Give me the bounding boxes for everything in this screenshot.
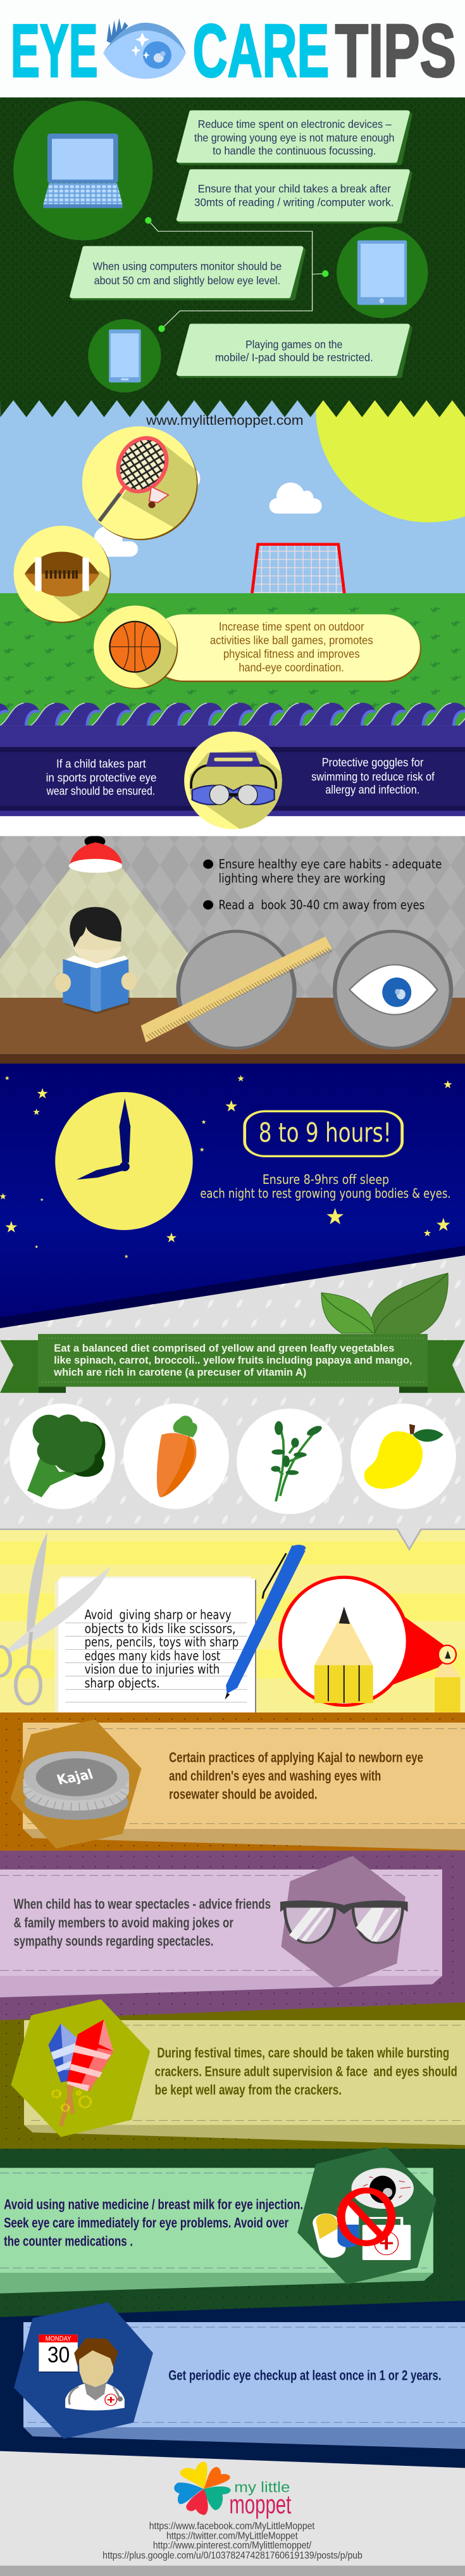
section: diet and sharp objects	[0, 1334, 465, 1712]
card: checkup advice	[23, 2322, 465, 2449]
section: balanced diet background	[0, 1255, 465, 1530]
text: sleep advice	[200, 1172, 450, 1201]
band: protective eye wear: If a child takes part	[56, 758, 146, 770]
desk	[0, 998, 465, 1054]
panel: paper note	[55, 1576, 256, 1712]
ribbon: balanced diet: Eat a balanced diet comprised of yellow and green leafly vegetables	[54, 1342, 395, 1354]
footer links	[102, 2520, 363, 2561]
footer links: https://twitter.com/MyLittleMoppet	[166, 2530, 298, 2541]
card: kajal advice	[23, 1723, 465, 1850]
card: monitor distance: about 50 cm and slightly below eye level.	[94, 274, 280, 287]
card: spectacles advice	[0, 1869, 442, 1997]
card: playing games: mobile/ I-pad should be restricted.	[215, 351, 373, 363]
footer panel	[0, 2451, 465, 2566]
icon: broccoli	[9, 1404, 115, 1509]
badge: 8 to 9 hours	[245, 1111, 402, 1156]
icon: clock	[55, 1092, 193, 1230]
ribbon: balanced diet: like spinach, carrot, broccoli.. yellow fruits including papaya and mango,	[54, 1354, 412, 1366]
icon: goggles	[184, 732, 285, 829]
panel: paper note: edges many kids have lost	[85, 1649, 220, 1664]
card: medicine advice	[0, 2168, 433, 2294]
card: playing games: Playing games on the	[245, 338, 342, 351]
card: spectacles advice: & family members to avoid making jokes or	[14, 1915, 233, 1930]
panel: paper note: Avoid giving sharp or heavy	[85, 1608, 232, 1623]
section: eye checkup	[0, 2303, 465, 2576]
icon: leaves	[321, 1273, 448, 1335]
icon: laptop in circle	[13, 101, 152, 241]
stars	[0, 1075, 452, 1258]
cloud	[270, 482, 322, 513]
leaf pattern	[0, 1255, 465, 1530]
icon: doctor and calendar	[14, 2303, 153, 2439]
logo: my little moppet: my little	[234, 2479, 290, 2496]
text: sleep advice: Ensure 8-9hrs off sleep	[263, 1172, 389, 1187]
card: take a break: 30mts of reading / writing /computer work.	[194, 196, 394, 208]
icon: kajal box	[10, 1719, 142, 1849]
card: monitor distance: When using computers monitor should be	[93, 260, 282, 272]
light cone	[0, 865, 190, 998]
icon: child reading book	[55, 907, 137, 1014]
icon: basketball	[94, 606, 184, 690]
icon: tablet in circle	[337, 227, 428, 318]
card: medicine advice: the counter medications .	[4, 2234, 133, 2249]
icon: carrot	[123, 1404, 229, 1509]
card: spectacles advice: sympathy sounds regarding spectacles.	[14, 1933, 214, 1949]
band: protective eye wear: in sports protective eye	[46, 772, 156, 784]
card: take a break: Ensure that your child takes a break after	[198, 182, 391, 195]
panel: paper note: vision due to injuries with	[85, 1662, 220, 1677]
section background: spectacles	[0, 1850, 465, 2024]
cloud behind circles	[93, 469, 200, 556]
footer bar	[0, 2566, 465, 2576]
icon: no medicine	[297, 2147, 437, 2284]
callout: outdoor activities: activities like ball games, promotes	[210, 634, 373, 648]
card: playing games	[179, 326, 410, 376]
ribbon: balanced diet: which are rich in carotene (a precuser of vitamin A)	[53, 1366, 306, 1378]
callout: outdoor activities: hand-eye coordination.	[239, 662, 344, 674]
callout: outdoor activities	[148, 614, 421, 682]
card: reduce time: to handle the continuous focussing.	[213, 144, 376, 157]
card: kajal advice: rosewater should be avoided.	[169, 1787, 318, 1802]
ribbon: balanced diet	[0, 1334, 465, 1393]
logo: my little moppet	[174, 2462, 291, 2519]
logo: my little moppet: moppet	[229, 2489, 291, 2519]
section: sleep	[0, 1064, 465, 1333]
waves	[0, 703, 465, 726]
section background: eye checkup	[0, 2301, 465, 2469]
panel: paper note: pens, pencils, toys with sharp	[85, 1635, 239, 1650]
title: EYE	[11, 9, 98, 93]
footer links: http://www.pinterest.com/Mylittlemoppet/	[153, 2540, 312, 2551]
band: protective eye wear: wear should be ensured.	[46, 785, 155, 798]
icon: lamp	[69, 836, 122, 873]
callout: outdoor activities: physical fitness and improves	[223, 648, 360, 661]
icon: phone in circle	[88, 319, 161, 393]
website url: www.mylittlemoppet.com	[146, 413, 304, 428]
icon: scissors	[0, 1532, 110, 1704]
section background: crackers	[0, 2002, 465, 2152]
panel: paper note: sharp objects.	[85, 1676, 160, 1691]
card: reduce time: the growing young eye is not mature enough	[194, 131, 394, 144]
icon: football	[14, 525, 119, 624]
striped yellow background	[0, 1530, 465, 1712]
card: take a break	[179, 172, 410, 222]
band: protective eye wear: allergy and infection.	[325, 784, 419, 796]
icon: eye logo	[103, 18, 186, 79]
footer links: https://www.facebook.com/MyLittleMoppet	[149, 2520, 315, 2531]
panel: paper note: objects to kids like scissors,	[85, 1621, 236, 1637]
section: title header and screen time	[0, 0, 465, 408]
section: reading habits	[0, 836, 465, 1064]
icon: fire crackers	[11, 1999, 150, 2137]
icon: eye in circle	[335, 931, 451, 1048]
icon: ruler	[141, 936, 332, 1043]
section background: medicine	[0, 2149, 465, 2324]
card: monitor distance	[72, 248, 304, 298]
zigzag edge	[0, 398, 465, 417]
text: reading tips	[203, 857, 442, 912]
band: protective eye wear	[0, 726, 465, 816]
section: outdoor play and goggles	[0, 398, 465, 829]
card: reduce time	[179, 113, 410, 163]
band: protective eye wear: swimming to reduce risk of	[311, 770, 435, 784]
connector lines	[145, 217, 328, 332]
icon: badminton racket	[82, 426, 198, 541]
section: crackers and medicine	[0, 1999, 465, 2324]
band: protective eye wear: Protective goggles for	[322, 757, 423, 769]
callout: outdoor activities: Increase time spent on outdoor	[219, 621, 364, 634]
grass	[0, 593, 465, 726]
section: kajal and spectacles	[0, 1712, 465, 2024]
icon: doctor and calendar: 30	[47, 2343, 70, 2368]
icon: sun	[316, 400, 465, 523]
title: CARE	[193, 9, 329, 93]
icon: kajal box: Kajal	[55, 1767, 96, 1788]
icon: mango	[350, 1404, 456, 1509]
icon: magnifier over pencil	[280, 1577, 461, 1712]
icon: doctor and calendar: MONDAY	[46, 2334, 71, 2342]
icon: leafy herb	[237, 1409, 342, 1514]
icon: pen	[225, 1545, 306, 1700]
icon: spectacles	[280, 1856, 408, 1988]
distance circle	[178, 931, 294, 1048]
card: reduce time: Reduce time spent on electronic devices –	[198, 118, 392, 130]
title	[11, 9, 456, 93]
goal net	[252, 544, 345, 593]
card: crackers advice	[24, 2020, 465, 2145]
